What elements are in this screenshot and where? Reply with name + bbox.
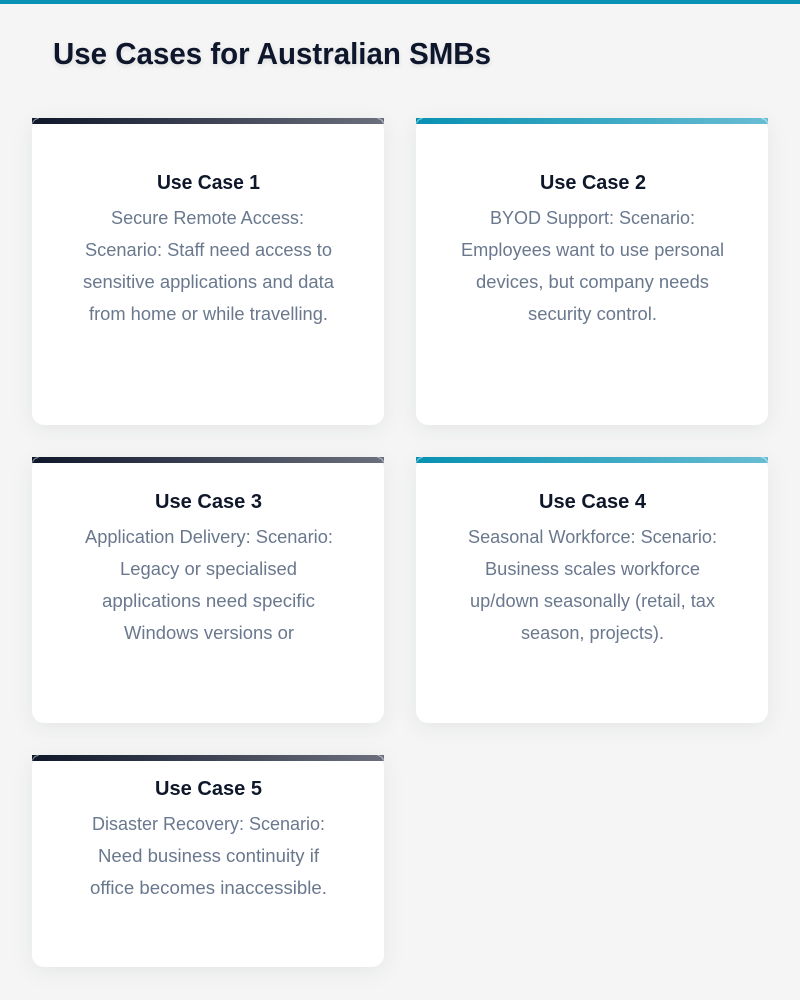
- text: use case 1 description: Scenario: Staff need access to: [85, 239, 332, 260]
- text: use case 3 description: Windows versions or: [124, 622, 294, 643]
- text: use case 3 description: [85, 526, 333, 643]
- text: use case 2 description: BYOD Support: Scenario:: [490, 207, 695, 228]
- panel: use case 1: [32, 118, 384, 425]
- text: use case 4 description: [468, 526, 717, 643]
- heading: use case 3: Use Case 3: [155, 490, 262, 513]
- text: use case 1 description: sensitive applications and data: [83, 271, 335, 292]
- title: Use Cases for Australian SMBs: [53, 36, 491, 71]
- heading: use case 2: Use Case 2: [540, 171, 646, 194]
- text: use case 5 description: office becomes inaccessible.: [90, 877, 327, 898]
- text: use case 4 description: season, projects).: [521, 622, 664, 643]
- text: use case 2 description: security control.: [528, 303, 657, 324]
- heading: use case 1: Use Case 1: [157, 171, 260, 194]
- panel: use case 3: [32, 457, 384, 723]
- text: use case 3 description: applications need specific: [102, 590, 315, 611]
- page top accent bar: [0, 0, 800, 4]
- panel: use case 4: [416, 457, 768, 723]
- text: use case 4 description: up/down seasonally (retail, tax: [470, 590, 716, 611]
- heading: use case 5: Use Case 5: [155, 777, 262, 800]
- text: use case 3 description: Application Delivery: Scenario:: [85, 526, 333, 547]
- text: use case 5 description: Disaster Recovery: Scenario:: [92, 813, 325, 834]
- text: use case 4 description: Seasonal Workforce: Scenario:: [468, 526, 717, 547]
- text: use case 1 description: [83, 207, 335, 324]
- text: use case 3 description: Legacy or specialised: [120, 558, 297, 579]
- heading: use case 4: Use Case 4: [539, 490, 647, 513]
- text: use case 1 description: Secure Remote Access:: [111, 207, 304, 228]
- panel: use case 5: [32, 755, 384, 967]
- text: use case 1 description: from home or while travelling.: [89, 303, 328, 324]
- panel: use case 2: [416, 118, 768, 425]
- text: use case 4 description: Business scales workforce: [485, 558, 700, 579]
- text: use case 2 description: [461, 207, 724, 324]
- text: use case 5 description: [90, 813, 327, 898]
- text: use case 2 description: devices, but company needs: [476, 271, 709, 292]
- text: use case 5 description: Need business continuity if: [98, 845, 320, 866]
- text: use case 2 description: Employees want to use personal: [461, 239, 724, 260]
